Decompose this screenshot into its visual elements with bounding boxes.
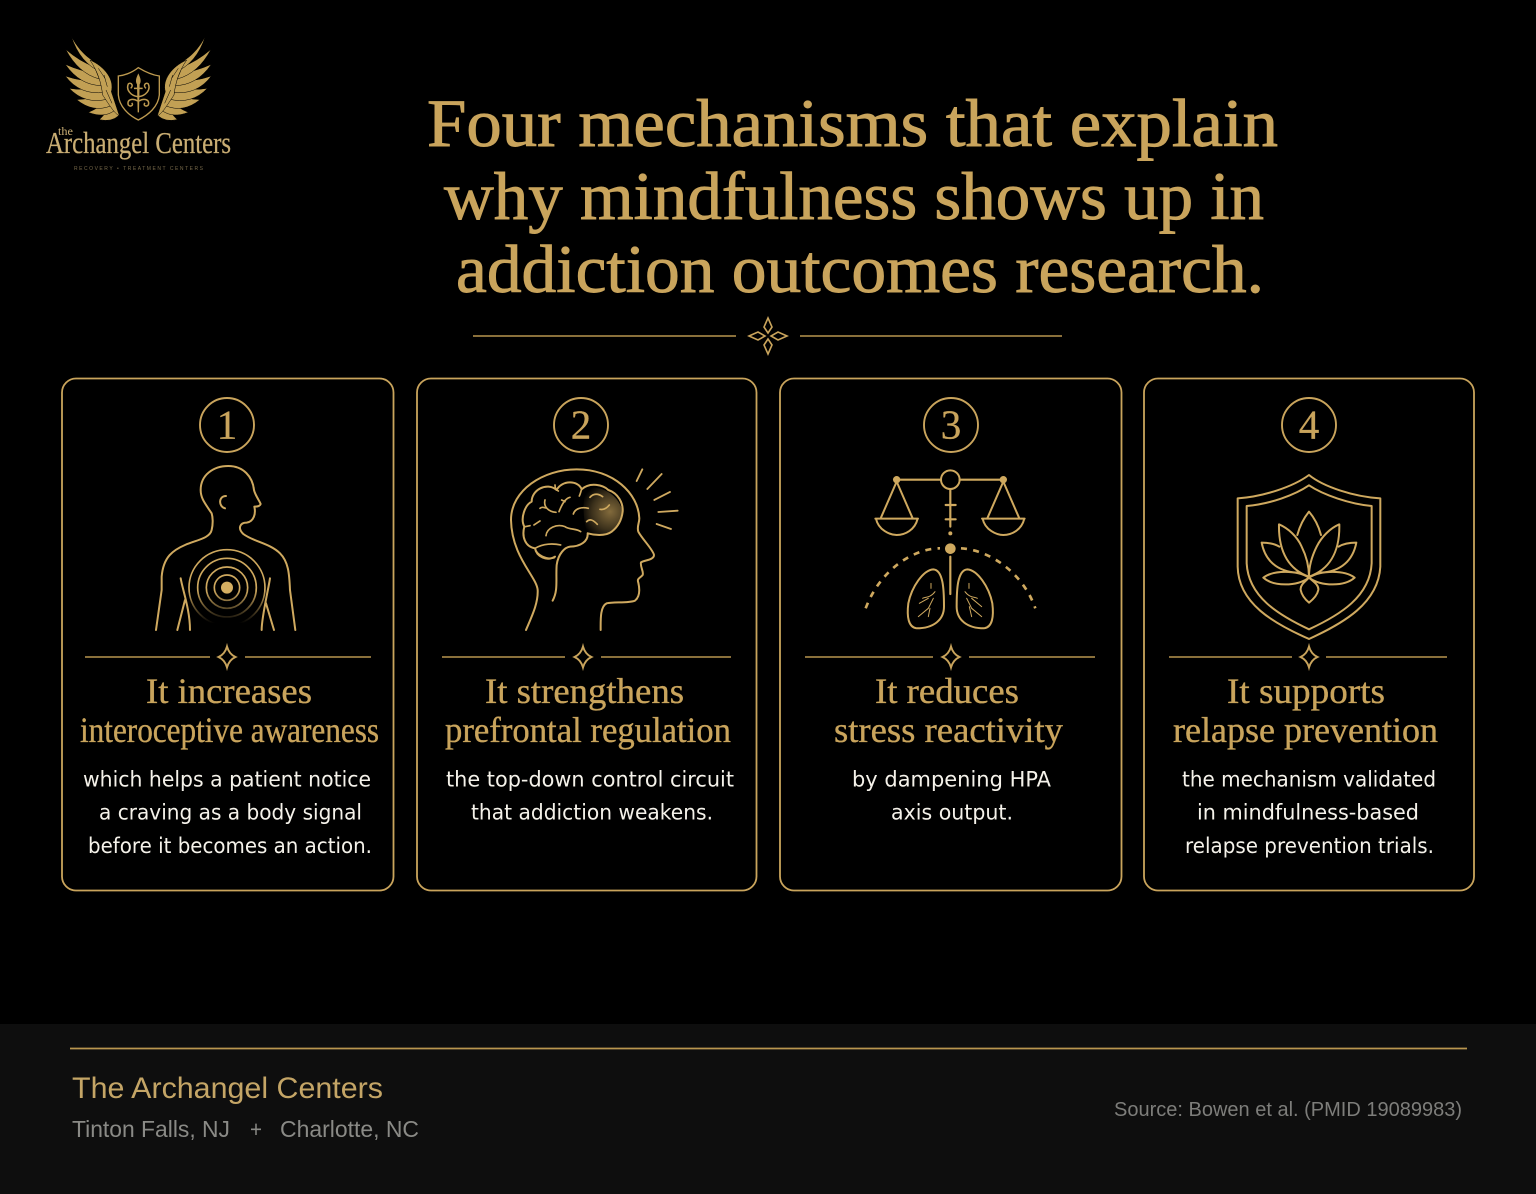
panel: card 3 stress reactivity — [780, 378, 1122, 890]
number badge 1 — [200, 398, 254, 452]
panel: card 1 interoceptive awareness — [62, 378, 394, 890]
body text — [83, 768, 372, 859]
divider — [442, 646, 731, 668]
title: why mindfulness shows up in — [444, 158, 1264, 234]
icon: body with radiating chest signal — [156, 466, 295, 630]
body text: the top-down control circuit — [446, 768, 734, 792]
heading — [80, 671, 379, 750]
footer locations: + — [250, 1116, 262, 1142]
logo wordmark: Archangel Centers: Archangel Centers — [46, 125, 231, 160]
heading: It increases — [146, 671, 312, 711]
icon: shield with lotus — [1238, 475, 1380, 639]
number badge 4 — [1282, 398, 1336, 452]
number badge 4: 4 — [1299, 402, 1319, 448]
body text: the mechanism validated — [1182, 768, 1436, 792]
footer locations: Tinton Falls, NJ — [72, 1116, 230, 1142]
heading: It reduces — [875, 671, 1019, 711]
body text — [852, 768, 1051, 826]
number badge 2: 2 — [571, 402, 591, 448]
divider — [1169, 646, 1447, 668]
body text — [446, 768, 734, 826]
divider — [85, 646, 371, 668]
footer organization name: The Archangel Centers — [72, 1072, 383, 1105]
title: Four mechanisms that explain — [427, 85, 1278, 161]
divider — [805, 646, 1095, 668]
title: addiction outcomes research. — [456, 231, 1264, 307]
body text: in mindfulness-based — [1197, 800, 1419, 826]
logo tagline: RECOVERY • TREATMENT CENTERS — [74, 166, 204, 172]
icon: winged shield — [65, 36, 211, 120]
body text — [1182, 768, 1436, 859]
body text: a craving as a body signal — [99, 800, 362, 826]
heading: It strengthens — [485, 671, 684, 711]
footer locations: Charlotte, NC — [280, 1116, 419, 1142]
heading: stress reactivity — [834, 710, 1063, 750]
logo wordmark: the: the — [58, 124, 73, 138]
heading — [1173, 671, 1438, 750]
heading: prefrontal regulation — [445, 710, 731, 750]
footer source citation: Source: Bowen et al. (PMID 19089983) — [1114, 1099, 1462, 1121]
heading — [834, 671, 1063, 750]
body text: axis output. — [891, 800, 1013, 826]
footer band — [0, 1024, 1536, 1194]
number badge 2 — [554, 398, 608, 452]
body text: by dampening HPA — [852, 768, 1051, 792]
title divider with ornament — [473, 318, 1062, 354]
icon: balance scale above lungs — [866, 470, 1035, 628]
body text: that addiction weakens. — [471, 800, 713, 826]
heading: interoceptive awareness — [80, 710, 379, 750]
number badge 3: 3 — [941, 402, 961, 448]
body text: before it becomes an action. — [88, 834, 372, 859]
heading: It supports — [1227, 671, 1385, 711]
number badge 1: 1 — [217, 402, 237, 448]
footer locations — [72, 1116, 419, 1142]
panel: card 4 relapse prevention — [1144, 378, 1474, 890]
body text: relapse prevention trials. — [1185, 834, 1434, 859]
logo: The Archangel Centers — [46, 36, 231, 172]
body text: which helps a patient notice — [83, 768, 371, 792]
number badge 3 — [924, 398, 978, 452]
panel: card 2 prefrontal regulation — [417, 378, 756, 890]
icon: head with brain and highlighted prefrontal area — [511, 469, 678, 630]
heading — [445, 671, 731, 750]
title — [427, 85, 1278, 307]
heading: relapse prevention — [1173, 710, 1438, 750]
